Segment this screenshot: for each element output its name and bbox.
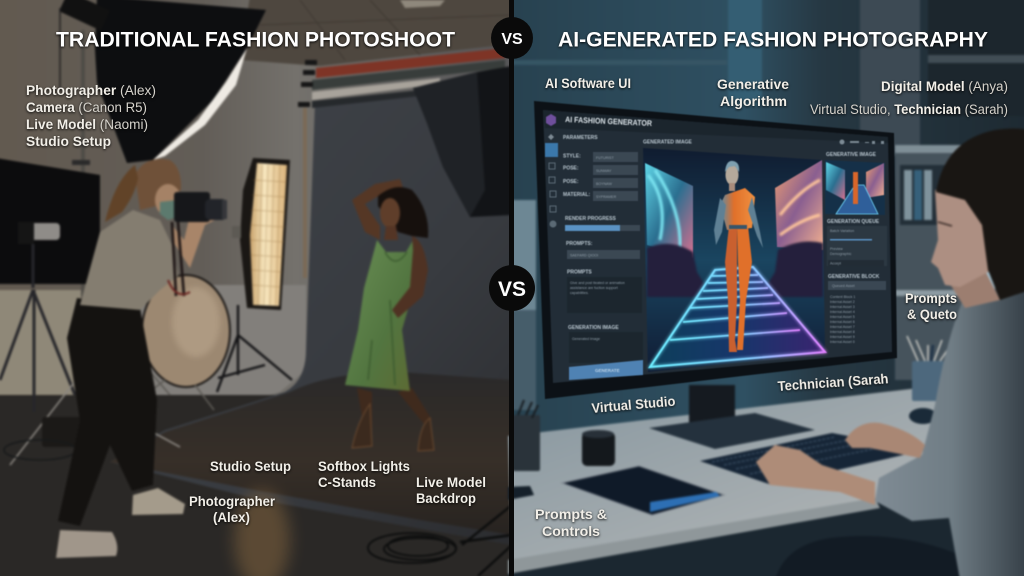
label: generative algorithm: Algorithm: [720, 94, 787, 109]
UI parameters panel: FUTURIST: [596, 156, 615, 160]
shelves: [895, 145, 1024, 380]
UI right column: Internal Asset 7: [830, 325, 855, 329]
UI parameters panel: RENDER PROGRESS: [565, 216, 617, 222]
screen UI background: [543, 110, 892, 383]
UI sidebar: [545, 134, 558, 228]
studio wall: [0, 0, 512, 416]
AI software monitor: [534, 101, 897, 399]
VS badge top: [491, 17, 533, 59]
AI digital model figure: [714, 161, 763, 352]
VS badge top: VS: [501, 31, 523, 48]
backdrop paper: [110, 90, 512, 545]
UI right column: Internal Asset 8: [830, 330, 855, 334]
model: live model in green dress: [345, 179, 434, 451]
floor light pool: [234, 490, 290, 576]
text block: traditional elements list: Studio Setup: [26, 134, 111, 149]
panel: traditional fashion photoshoot scene: [0, 0, 512, 576]
monitor stand: [689, 385, 735, 427]
UI parameters panel: Give and post tleated or animation: [570, 281, 625, 285]
label: prompts and queue: & Queto: [907, 307, 957, 322]
ceiling: [240, 0, 512, 66]
UI right column: Batch Variation: [830, 229, 854, 233]
reflector disc: [140, 275, 230, 410]
text block: traditional elements list: [26, 83, 156, 149]
cup: [582, 430, 615, 466]
office background: [512, 0, 1024, 436]
UI right column: GENERATIVE IMAGE: [826, 152, 877, 158]
desk: [508, 378, 1024, 566]
text block: AI elements list: [810, 79, 1008, 117]
UI right column: Internal Asset 9: [830, 335, 855, 339]
backdrop floor sweep: [110, 372, 512, 535]
UI parameters panel: STYLE:: [563, 154, 581, 160]
label: prompts and queue: Prompts: [905, 291, 957, 306]
mouse: [909, 408, 937, 424]
UI parameters panel: capabilities.: [570, 291, 589, 295]
label: prompts and controls: Prompts &: [535, 507, 607, 522]
UI right column: Preview: [830, 247, 843, 251]
label: live model and backdrop: [416, 475, 486, 506]
UI title bar: AI FASHION GENERATOR: [565, 115, 652, 128]
label: prompts and controls: Controls: [542, 524, 600, 539]
tripod camera at left: [0, 222, 180, 465]
UI right column: Content Block 1: [830, 295, 855, 299]
black flag / monitor at left: [0, 158, 100, 284]
panel: AI-generated fashion photography scene: [508, 0, 1024, 576]
text block: traditional elements list: Photographer (Alex): [26, 83, 156, 98]
UI title bar: [543, 110, 888, 144]
strip softbox: [232, 158, 290, 310]
label: live model and backdrop: Live Model: [416, 475, 486, 490]
softbox stand: [217, 305, 292, 392]
UI right column: Internal Asset 6: [830, 320, 855, 324]
keyboard: [700, 433, 925, 485]
title: traditional: TRADITIONAL FASHION PHOTOSHOOT: [56, 28, 455, 52]
label: AI software UI: AI Software UI: [545, 76, 631, 91]
label: prompts and controls: [535, 507, 607, 539]
UI parameters panel: GENERATION IMAGE: [568, 325, 619, 331]
UI parameters panel: GENERATE: [595, 368, 620, 373]
UI right column: Demographic: [830, 252, 852, 256]
UI parameters panel: Generated Image: [572, 337, 600, 341]
UI parameters panel: MATERIAL:: [563, 192, 590, 198]
runway with neon lines: [650, 267, 825, 367]
monitor bezel: [534, 101, 897, 399]
cable coil: [368, 505, 512, 576]
photographer: Alex with camera: [56, 159, 227, 558]
UI parameters panel: SYPRAMER: [596, 195, 617, 199]
large softbox overhead: [59, 0, 266, 163]
text block: traditional elements list: Live Model (Naomi): [26, 117, 148, 132]
UI parameters panel: [563, 135, 643, 380]
UI right column: Internal Asset 3: [830, 305, 855, 309]
floor: [0, 395, 512, 576]
label: virtual studio: Virtual Studio: [591, 394, 676, 416]
UI parameters panel: assistance are fuction support: [570, 286, 618, 290]
label: softbox lights and C-stands: [318, 459, 410, 490]
VS badge center: VS: [498, 278, 526, 301]
UI parameters panel: BOYNAW: [596, 182, 612, 186]
label: photographer: (Alex): [213, 510, 250, 525]
lower wall and white sweep: [0, 290, 86, 398]
UI right column: Queued Asset: [832, 284, 855, 288]
chair and lap: [775, 536, 1024, 576]
light stand pole: [81, 30, 85, 330]
UI parameters panel: PROMPTS: [567, 270, 592, 276]
UI parameters panel: POSE:: [563, 166, 579, 172]
right softbox: [413, 66, 512, 217]
UI right column: [825, 152, 887, 344]
label: generative algorithm: Generative: [717, 77, 789, 92]
text block: traditional elements list: Camera (Canon R5): [26, 100, 147, 115]
label: studio setup: Studio Setup: [210, 459, 291, 474]
thumbnail preview: [825, 160, 885, 215]
UI right column: GENERATION QUEUE: [827, 219, 880, 225]
UI right column: Internal Asset 0: [830, 340, 855, 344]
UI parameters panel: SUNWAY: [596, 169, 612, 173]
label: photographer: [189, 494, 276, 525]
pen holder right: [907, 336, 954, 401]
VS badge center: [489, 265, 535, 311]
UI parameters panel: PARAMETERS: [563, 135, 598, 141]
UI right column: Internal Asset 2: [830, 300, 855, 304]
label: prompts and queue: [905, 291, 957, 322]
label: generative algorithm: [717, 77, 789, 109]
UI parameters panel: SAEFARD QIOOI: [570, 254, 598, 258]
label: softbox lights and C-stands: C-Stands: [318, 475, 376, 490]
backdrop rollers: [298, 48, 505, 278]
UI right column: Internal Asset 4: [830, 310, 855, 314]
label: live model and backdrop: Backdrop: [416, 491, 476, 506]
technician: Sarah at workstation: [756, 128, 1024, 576]
UI right column: Internal Asset 5: [830, 315, 855, 319]
pen holder left: [512, 400, 540, 471]
label: softbox lights and C-stands: Softbox Lights: [318, 459, 410, 474]
UI generated image: GENERATED IMAGE: [643, 140, 692, 146]
label: technician: Technician (Sarah: [777, 371, 889, 394]
text block: AI elements list: Digital Model (Anya): [881, 79, 1008, 94]
center divider: [509, 0, 514, 576]
phone: [508, 486, 534, 500]
UI generated image: [643, 140, 825, 372]
tablet: [562, 466, 724, 515]
UI right column: Accept: [830, 262, 841, 266]
label: photographer: Photographer: [189, 494, 276, 509]
UI parameters panel: POSE:: [563, 179, 579, 185]
UI right column: GENERATIVE BLOCK: [828, 274, 880, 280]
title: AI-generated: AI-GENERATED FASHION PHOTOGRAPHY: [558, 28, 988, 52]
text block: AI elements list: Virtual Studio, Technician (Sarah): [810, 102, 1008, 117]
UI parameters panel: PROMPTS:: [566, 241, 593, 247]
